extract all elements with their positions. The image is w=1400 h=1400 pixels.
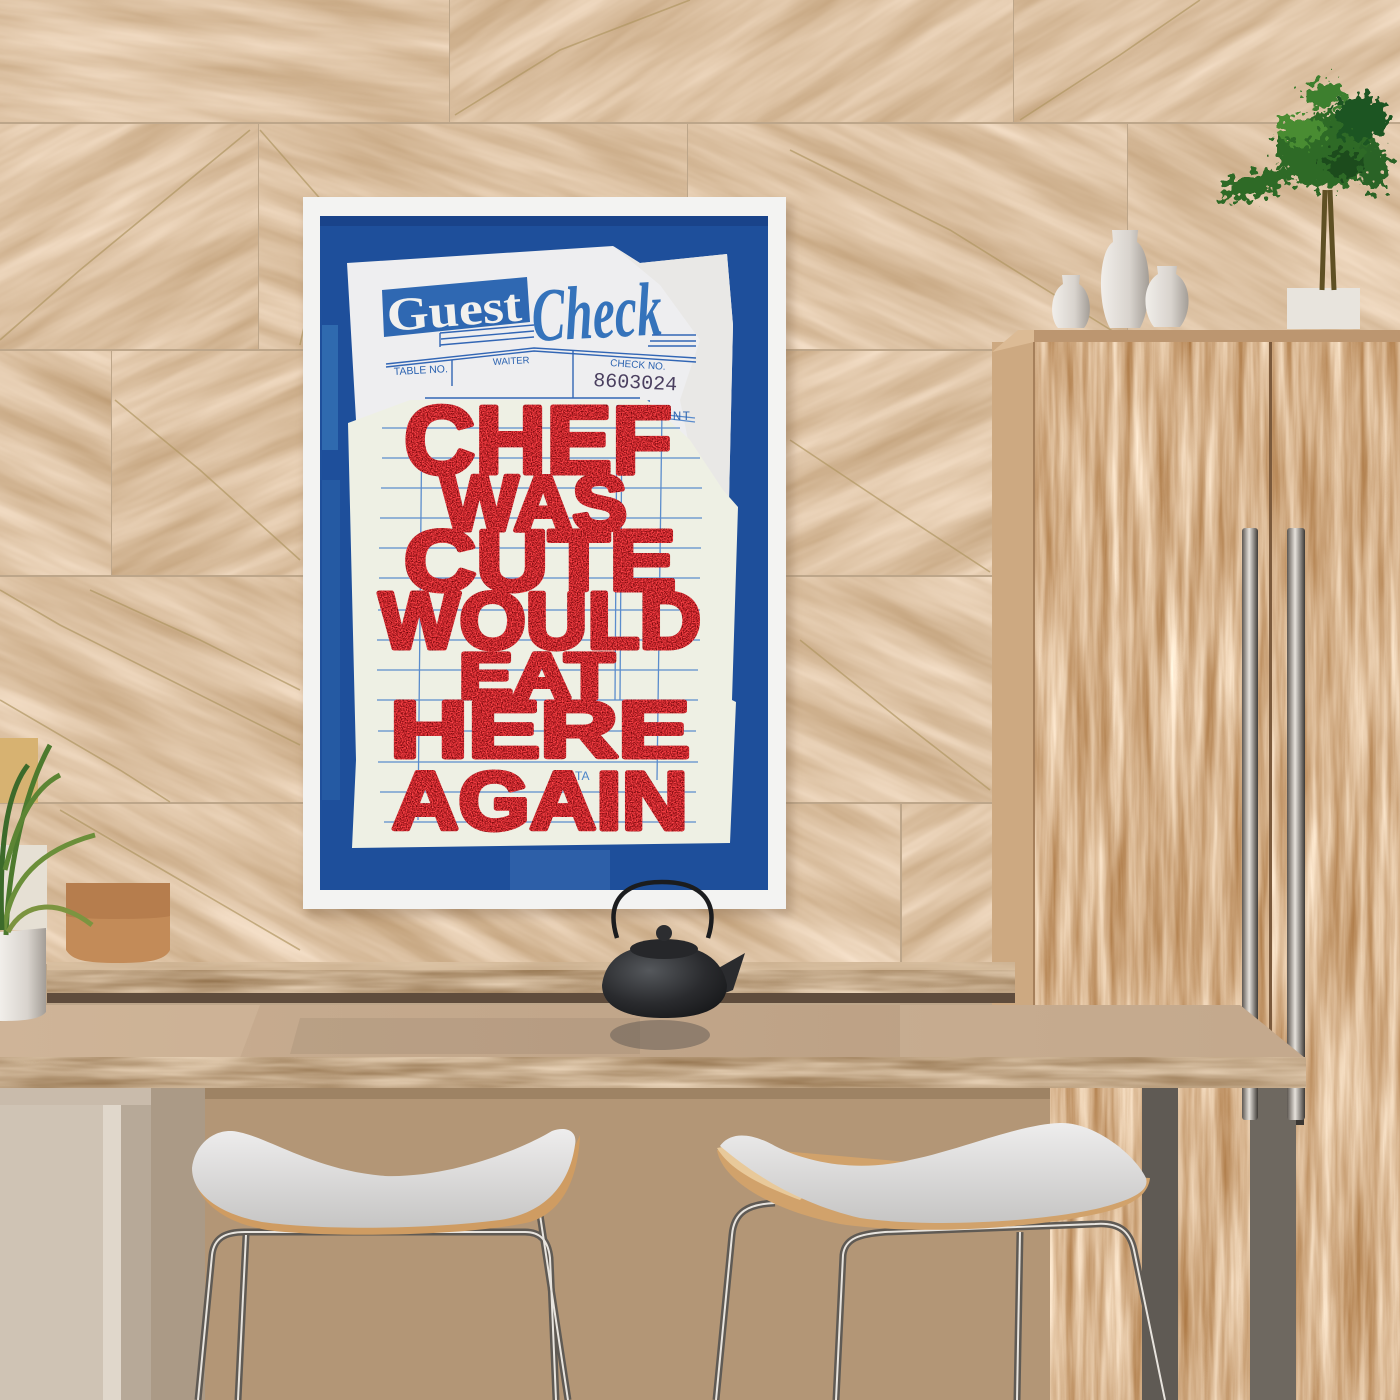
white pot [0, 928, 46, 1021]
left door [1034, 342, 1270, 1062]
counter top [0, 1005, 1305, 1058]
counter edge [0, 1057, 1306, 1088]
ruled lines [377, 405, 702, 822]
leaves [1, 745, 95, 935]
waiter label: WAITER [493, 355, 530, 368]
back shelf [47, 962, 1015, 1003]
wood cabinet [992, 330, 1400, 1400]
fabric seat [720, 1123, 1147, 1223]
AGAIN: AGAIN [392, 756, 688, 847]
dark gaps [1142, 1085, 1178, 1400]
body [602, 945, 727, 1018]
CUTE: CUTE [404, 514, 676, 609]
WAS: WAS [441, 459, 627, 547]
check script: Check [529, 267, 664, 358]
legs [198, 1215, 568, 1400]
foliage [1217, 81, 1389, 207]
cabinet top [1034, 330, 1400, 342]
blue mat [320, 216, 768, 890]
brown recess [205, 1085, 1050, 1400]
small vase [1052, 275, 1090, 328]
right door [1272, 342, 1400, 1400]
handle [614, 882, 711, 938]
spout [712, 953, 745, 998]
check number: 8603024 [593, 370, 678, 397]
guest check top sheet [347, 246, 733, 510]
left plant [0, 745, 95, 1021]
tax label: TA [575, 769, 589, 783]
marble veins [0, 0, 1200, 950]
glitter lettering [379, 387, 701, 847]
leg highlights [198, 1215, 568, 1400]
stool right [716, 1123, 1165, 1400]
wall of marble tiles [0, 0, 1400, 1005]
left boards [0, 738, 47, 930]
potted tree [1217, 81, 1389, 329]
vases [1052, 230, 1189, 328]
fabric seat [192, 1129, 575, 1228]
round vase [1145, 266, 1189, 327]
lower wood panels [1050, 1085, 1142, 1400]
check no label: CHECK NO. [610, 358, 666, 373]
island counter [0, 1005, 1306, 1088]
teapot [602, 882, 745, 1018]
white frame [303, 197, 786, 909]
guest label: Guest [385, 280, 524, 342]
lid [630, 939, 698, 959]
legs [716, 1203, 1165, 1400]
cabinet side panel [992, 342, 1034, 1010]
wood bowls [66, 883, 170, 963]
leg highlights [716, 1203, 1165, 1400]
poster shadow [306, 204, 792, 916]
CHEF: CHEF [404, 387, 672, 494]
HERE: HERE [390, 685, 690, 774]
teapot reflection [610, 1020, 710, 1050]
pot [1287, 288, 1360, 329]
EAT: EAT [459, 640, 614, 712]
framed poster [303, 197, 786, 909]
wood shell [717, 1150, 1150, 1230]
guest check lower sheet [348, 387, 738, 848]
stool left [192, 1129, 580, 1400]
WOULD: WOULD [379, 576, 701, 665]
wood shell [192, 1135, 580, 1235]
handle right [1287, 528, 1305, 1120]
glass reflection [510, 850, 610, 890]
table no label: TABLE NO. [394, 363, 448, 378]
handle left [1242, 528, 1258, 1120]
tall vase [1101, 230, 1149, 328]
left cabinet panel [0, 1085, 205, 1400]
lower base [0, 1085, 1050, 1400]
amount label: AMOUNT [632, 411, 691, 423]
form lines [386, 325, 696, 401]
trunk [1322, 190, 1334, 290]
